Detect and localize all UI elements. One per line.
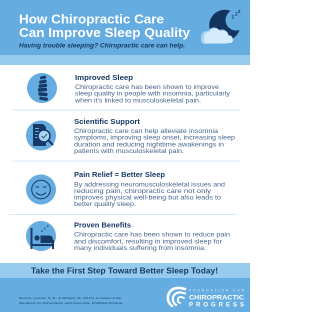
body text: Chiropractic care has been shown to improve: [75, 85, 220, 91]
body text: better quality sleep.: [74, 202, 136, 208]
panel: improved sleep: [27, 73, 230, 104]
icon: person in bed: z: [44, 226, 46, 230]
logo: foundation for chiropractic progress: [168, 288, 245, 308]
icon: document and magnifier: [26, 120, 56, 150]
heading: Scientific Support: [74, 119, 141, 126]
source citation: [19, 296, 123, 305]
subtitle: Having trouble sleeping? Chiropractic care can help.: [19, 44, 185, 50]
body text: duration and reducing nighttime awakenings in: [74, 142, 224, 148]
footer band: [0, 278, 250, 312]
icon: moon and cloud: z: [235, 12, 238, 18]
body text: [74, 182, 225, 208]
title: Can Improve Sleep Quality: [19, 25, 191, 40]
icon: moon and cloud: z: [232, 14, 234, 20]
heading: Proven Benefits: [74, 223, 131, 230]
heading: Pain Relief = Better Sleep: [74, 172, 165, 179]
body text: [74, 233, 230, 252]
logo: foundation for chiropractic progress: PROGRESS: [189, 302, 244, 308]
body text: By addressing neuromusculoskeletal issues and: [74, 182, 225, 188]
header band: [0, 0, 250, 65]
body text: [74, 129, 236, 155]
icon: moon and cloud: [201, 9, 241, 44]
icon: calm face: [26, 174, 56, 204]
body text: Chiropractic care can help alleviate insomnia: [74, 129, 219, 135]
logo: foundation for chiropractic progress: CHIROPRACTIC: [189, 296, 245, 302]
call to action band: [0, 263, 250, 278]
body text: symptoms, improving sleep onset, increasing sleep: [74, 136, 236, 142]
panel: scientific support: [26, 119, 236, 155]
body text: Chiropractic care has been shown to reduce pain: [74, 233, 230, 239]
icon: moon and cloud: z: [238, 9, 241, 15]
source citation: Source: Leonsk, S. E., & Whalen, M. (2017). A review of the: [19, 296, 121, 300]
title: [19, 12, 191, 40]
panel: pain relief: [26, 172, 225, 208]
body text: when it's linked to musculoskeletal pain.: [74, 98, 201, 104]
icon: spine: [27, 73, 57, 103]
body text: patients with musculoskeletal pain.: [74, 149, 184, 155]
body text: improves physical well-being but also leads to: [74, 196, 222, 202]
body text: reducing pain, chiropractic care not only: [74, 189, 211, 195]
icon: person in bed: z: [47, 224, 49, 228]
body text: many individuals suffering from insomnia.: [74, 246, 206, 252]
body text: sleep quality in people with insomnia, particularly: [75, 92, 230, 98]
body text: [74, 85, 230, 104]
title: How Chiropractic Care: [19, 12, 164, 26]
logo: foundation for chiropractic progress: FOUNDATION FOR: [189, 288, 245, 292]
source citation: literature on chiropractic and insomnia. PubMed Central.: [19, 301, 123, 305]
heading: Improved Sleep: [75, 75, 133, 82]
body text: and discomfort, resulting in improved sleep for: [74, 239, 222, 245]
panel: proven benefits: [26, 221, 230, 252]
call to action band: Take the First Step Toward Better Sleep Today!: [31, 266, 218, 276]
icon: person in bed: z: [41, 229, 43, 233]
icon: person in bed: [26, 221, 56, 251]
